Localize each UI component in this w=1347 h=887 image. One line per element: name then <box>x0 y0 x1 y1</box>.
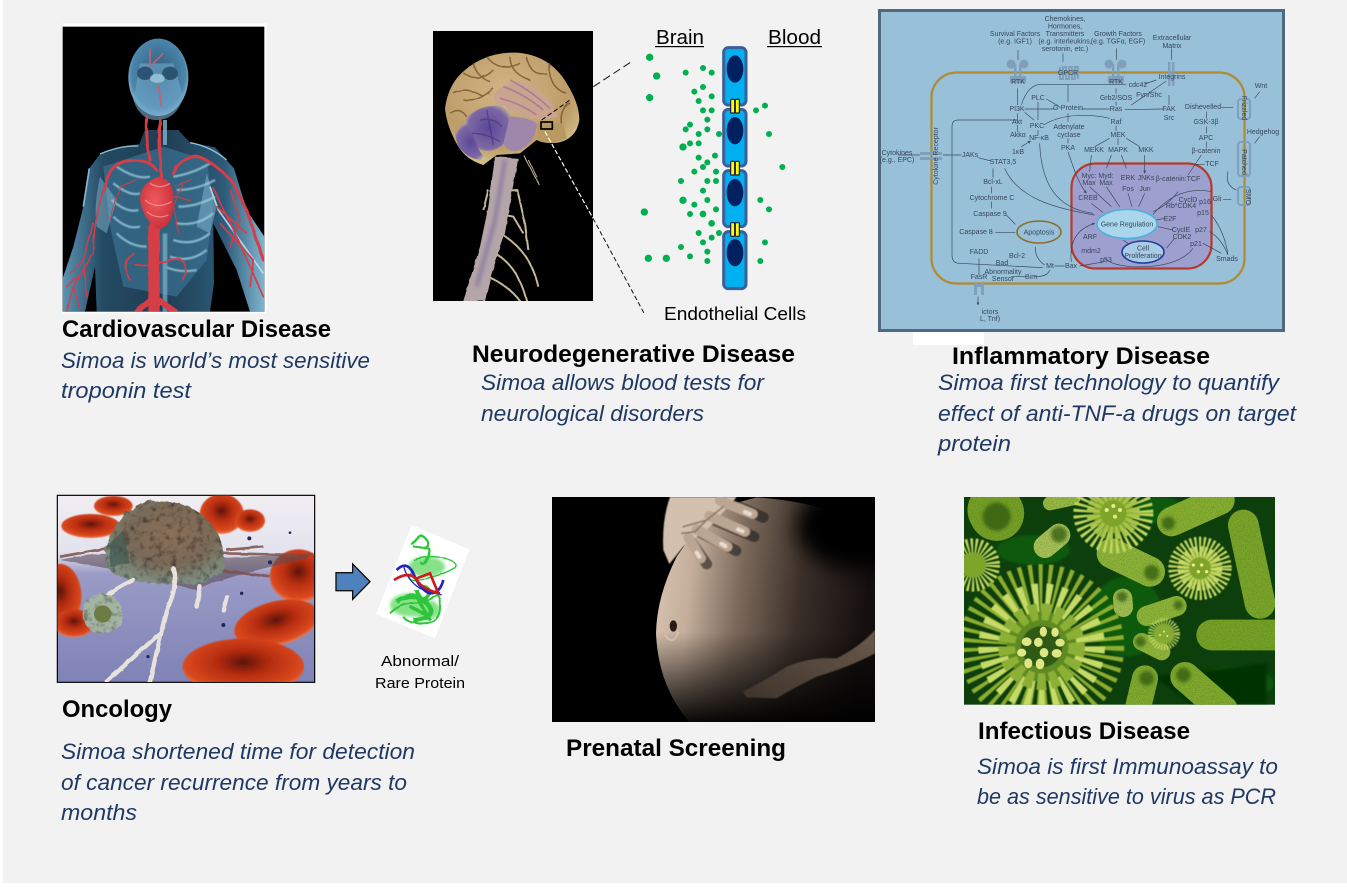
pathway labels: TCF <box>1205 161 1219 168</box>
pathway labels: CyclD <box>1179 197 1197 204</box>
gene regulation node <box>1097 210 1157 238</box>
pathway labels: Bim <box>1025 274 1037 281</box>
pathway labels: Ras <box>1110 106 1123 113</box>
cell membrane <box>932 72 1244 284</box>
nucleus <box>1072 164 1212 268</box>
pathway labels: Bad <box>996 260 1008 267</box>
pathway labels: Patched <box>1240 149 1247 175</box>
pathway labels: 1κB <box>1012 149 1024 156</box>
pathway labels: Grb2/SOS <box>1100 95 1132 102</box>
pathway labels: p27 <box>1195 227 1207 234</box>
label: endothelial cells: Endothelial Cells <box>664 303 806 324</box>
pathway labels: PKC <box>1030 123 1044 130</box>
pathway labels: Hormones, <box>1048 24 1082 30</box>
pathway labels: Gli <box>1213 196 1222 203</box>
label: blood: Blood <box>768 27 821 49</box>
pathway labels: SMO <box>1244 189 1251 206</box>
pathway labels: (e.g. TGFα, EGF) <box>1091 38 1145 46</box>
pathway arrows <box>898 48 1260 305</box>
pathway labels: Cytokines <box>882 150 913 157</box>
pathway labels: Myd: <box>1098 173 1114 180</box>
cell proliferation node <box>1122 241 1164 263</box>
label: abnormal / rare protein <box>375 653 465 692</box>
pathway labels: E2F <box>1164 216 1176 223</box>
heart <box>140 177 173 229</box>
description: oncology <box>61 739 415 825</box>
pathway labels: p15 <box>1197 210 1209 217</box>
pathway labels: Wnt <box>1255 83 1267 90</box>
apoptosis node <box>1017 221 1061 243</box>
pathway labels: APC <box>1199 135 1213 142</box>
pathway labels: Akt <box>1012 119 1022 126</box>
pathway labels: Transmitters <box>1046 31 1085 38</box>
pathway labels: mdm2 <box>1081 248 1101 255</box>
upper hand <box>663 497 763 564</box>
large spiky virus <box>987 592 1097 702</box>
red blood cells <box>58 496 314 682</box>
endothelial cells <box>724 48 746 289</box>
bacteria rods <box>995 498 1280 713</box>
pathway labels: Chemokines, <box>1045 16 1085 23</box>
description: neurodegenerative <box>481 370 766 426</box>
molecules: green dots <box>641 54 785 264</box>
pathway labels: Caspase 9 <box>973 211 1007 218</box>
description: oncology: Simoa shortened time for detection <box>61 739 415 764</box>
pathway labels: Integrins <box>1159 74 1186 81</box>
heading: inflammatory disease: Inflammatory Disease <box>952 343 1210 370</box>
pathway labels: (e.g. interleukins, <box>1038 38 1092 46</box>
pathway labels: GPCR <box>1058 70 1078 77</box>
pathway labels: Rb*CDK4 <box>1166 203 1196 210</box>
pathway labels: Src <box>1164 115 1175 122</box>
image: brain and spinal cord <box>433 31 785 315</box>
description: infectious: Simoa is first Immunoassay to <box>977 754 1278 779</box>
pathway labels: p16 <box>1199 199 1211 206</box>
pathway labels: p21 <box>1190 241 1202 248</box>
pathway labels: ERK <box>1121 175 1136 182</box>
description: infectious: be as sensitive to virus as PCR <box>977 784 1276 809</box>
pathway labels: PKA <box>1061 145 1075 152</box>
pathway labels: MEK <box>1110 132 1126 139</box>
pathway labels: MAPK <box>1108 147 1128 154</box>
panel: oncology <box>39 494 469 825</box>
heading: neurodegenerative disease: Neurodegenerative Disease <box>472 341 795 368</box>
description: inflammatory <box>937 370 1297 456</box>
image: human circulatory system <box>63 23 267 317</box>
pathway labels: Akkα <box>1010 132 1026 139</box>
pathway labels: Survival Factors <box>990 31 1041 38</box>
pathway labels: Growth Factors <box>1094 31 1142 38</box>
heading: infectious disease: Infectious Disease <box>978 718 1190 745</box>
pathway labels: MKK <box>1138 147 1154 154</box>
image: protein structure <box>376 525 469 638</box>
label: brain: Brain <box>656 27 704 49</box>
description: neurodegenerative: neurological disorders <box>481 401 704 426</box>
arrow <box>336 564 370 599</box>
pathway labels: Extracellular <box>1153 35 1192 42</box>
label: abnormal / rare protein: Rare Protein <box>375 675 465 692</box>
pathway labels: Jun <box>1139 186 1151 193</box>
panel: prenatal screening <box>552 497 875 761</box>
pathway labels: RTK <box>1011 79 1025 86</box>
pathway labels: CyclE <box>1172 227 1190 234</box>
rod end shadows <box>983 503 1191 686</box>
pathway labels: NF-κB <box>1029 135 1049 142</box>
pathway labels: PLC <box>1031 95 1045 102</box>
description: inflammatory: Simoa first technology to quantify <box>938 370 1281 395</box>
panel: inflammatory disease <box>880 10 1297 456</box>
pathway labels: L, Tnf) <box>980 316 1000 323</box>
cell proliferation node: Proliferation <box>1124 253 1162 260</box>
pathway labels: Matrix <box>1162 43 1182 50</box>
description: neurodegenerative: Simoa allows blood tests for <box>481 370 766 395</box>
pathway labels: CREB <box>1078 195 1098 202</box>
heading: oncology: Oncology <box>62 696 173 723</box>
pathway labels: Fyn/Shc <box>1136 92 1162 99</box>
pathway labels: Bcl-xL <box>983 179 1003 186</box>
pathway labels: G-Protein <box>1053 105 1083 112</box>
vessels <box>67 117 263 317</box>
pathway labels: Sensor <box>992 276 1015 283</box>
description: cardiovascular: troponin test <box>61 378 192 403</box>
pathway labels: ARF <box>1083 234 1097 241</box>
pathway labels: FAK <box>1162 106 1176 113</box>
heading: cardiovascular disease: Cardiovascular Disease <box>62 316 331 343</box>
pathway labels: RTK <box>1109 79 1123 86</box>
pathway labels: Caspase 8 <box>959 229 993 236</box>
pathway labels: Abnormality <box>985 269 1022 276</box>
gene regulation node: Gene Regulation <box>1101 222 1153 228</box>
pathway labels: Max <box>1099 180 1113 187</box>
pathway labels: cyclase <box>1057 132 1081 139</box>
pathway labels: β-catenin <box>1192 148 1221 155</box>
description: cardiovascular <box>61 348 370 403</box>
apoptosis node: Apoptosis <box>1024 230 1055 236</box>
pathway labels: (e.g. IGF1) <box>998 38 1032 46</box>
pathway labels: MEKK <box>1084 147 1104 154</box>
spiky viruses <box>955 485 1224 647</box>
pathway labels: Cytokine Receptor <box>933 127 940 185</box>
ribs <box>112 163 215 313</box>
description: oncology: months <box>61 800 137 825</box>
description: cardiovascular: Simoa is world’s most sensitive <box>61 348 370 373</box>
pathway labels: JAKs <box>962 152 979 159</box>
panel: infectious disease <box>955 485 1280 809</box>
pathway labels: STAT3,5 <box>990 159 1016 166</box>
pathway labels: GSK-3β <box>1193 119 1219 126</box>
pathway labels: Bax <box>1065 263 1078 270</box>
pathway labels: Fos <box>1122 186 1134 193</box>
description: inflammatory: protein <box>937 431 1011 456</box>
pathway labels: cdc42 <box>1129 82 1147 89</box>
receptors <box>920 60 1250 295</box>
pathway labels: CDK2 <box>1173 234 1191 241</box>
pathway labels: Cytochrome C <box>970 195 1014 202</box>
cancer cell <box>104 501 224 584</box>
pathway labels: Adenylate <box>1053 124 1085 131</box>
pathway labels: JNKs <box>1138 175 1155 182</box>
pathway labels: (e.g., EPC) <box>880 157 914 164</box>
pathway labels: PI3K <box>1009 106 1025 113</box>
pathway labels <box>880 16 1279 323</box>
cell proliferation node: Cell <box>1137 246 1149 252</box>
pathway labels: Bcl-2 <box>1009 253 1025 260</box>
description: oncology: of cancer recurrence from years to <box>61 770 407 795</box>
pathway labels: Frizzled <box>1240 96 1247 120</box>
lower hand <box>743 630 875 698</box>
image: pregnant belly <box>552 497 875 722</box>
description: inflammatory: effect of anti-TNF-a drugs on target <box>938 401 1297 426</box>
label: abnormal / rare protein: Abnormal/ <box>381 653 460 670</box>
pathway labels: FasR <box>971 274 987 281</box>
pathway labels: Myc: <box>1082 173 1096 180</box>
pathway labels: Raf <box>1111 119 1121 126</box>
pathway labels: FADD <box>970 249 988 256</box>
signalling pathway diagram <box>880 10 1284 330</box>
pathway labels: β-catenin:TCF <box>1156 176 1200 183</box>
pathway labels: Dishevelled <box>1185 104 1221 111</box>
panel: cardiovascular disease <box>61 23 370 403</box>
pathway labels: Smads <box>1216 256 1238 263</box>
pathway labels: p53 <box>1100 257 1112 264</box>
image: green microbes <box>964 497 1275 705</box>
description: infectious <box>977 754 1278 809</box>
panel: neurodegenerative disease <box>433 27 822 426</box>
pathway labels: Hedgehog <box>1247 129 1279 136</box>
pathway labels: Max <box>1082 180 1096 187</box>
heading: prenatal screening: Prenatal Screening <box>566 735 786 762</box>
decoration patch <box>913 331 984 345</box>
image: cancer cell among red blood cells <box>39 494 327 695</box>
pathway labels: serotonin, etc.) <box>1042 46 1088 53</box>
pathway labels: ictors <box>982 309 999 316</box>
pathway labels: Mt <box>1046 263 1054 270</box>
